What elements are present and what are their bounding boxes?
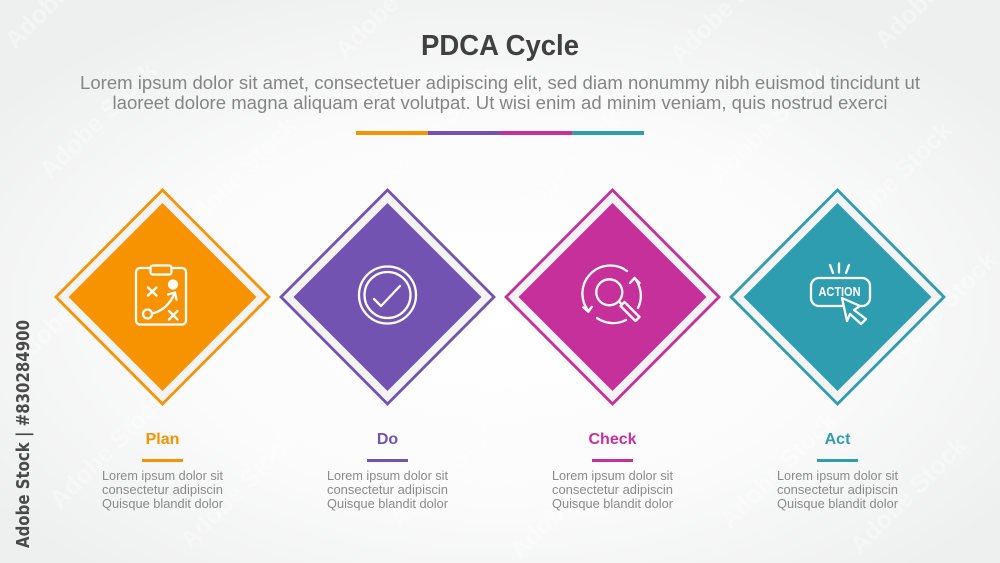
plan description: Lorem ipsum dolor sit [102,469,224,483]
title: PDCA Cycle [421,30,579,62]
act description: Quisque blandit dolor [777,497,898,511]
infographic canvas: Adobe Stock [499,106,627,234]
infographic canvas: Adobe Stock [174,111,302,239]
infographic canvas: Adobe Stock [844,431,972,559]
infographic canvas: Adobe Stock [174,426,302,554]
infographic canvas: Adobe Stock [714,406,842,534]
subtitle text block [80,73,920,113]
icon: magnifier with cycle arrows [582,266,641,323]
check diamond [506,190,719,404]
check description [552,469,674,511]
plan diamond [56,190,269,404]
panel: check [506,190,719,511]
subtitle text block: Lorem ipsum dolor sit amet, consectetuer adipiscing elit, sed diam nonummy nibh euismod tincidunt ut [80,73,920,93]
icon: check mark in circle [359,266,416,324]
do description: Lorem ipsum dolor sit [327,469,449,483]
check description: Quisque blandit dolor [552,497,673,511]
infographic canvas: Adobe Stock [874,246,1000,374]
infographic canvas: Adobe Stock [504,436,632,563]
infographic canvas: Adobe Stock [4,246,132,374]
infographic canvas: Adobe Stock [384,406,512,534]
check description: Lorem ipsum dolor sit [552,469,674,483]
infographic canvas: Adobe Stock [829,116,957,244]
icon: clipboard game plan [136,266,186,324]
act label: Act [825,431,851,448]
act description [777,469,899,511]
do diamond [281,190,494,404]
act diamond [731,190,944,404]
plan description [102,469,224,511]
plan description: consectetur adipiscin [102,483,223,497]
plan description: Quisque blandit dolor [102,497,223,511]
icon: action button with cursor [811,264,870,324]
infographic canvas: Adobe Stock [374,61,502,189]
four-colour title divider [356,131,644,135]
infographic canvas: Adobe Stock [44,386,172,514]
plan label: Plan [146,431,179,448]
do description [327,469,449,511]
act underline [817,459,858,462]
infographic canvas: Adobe Stock [34,56,162,184]
do description: consectetur adipiscin [327,483,448,497]
panel: act [731,190,944,511]
do description: Quisque blandit dolor [327,497,448,511]
do underline [367,459,408,462]
infographic canvas: Adobe Stock [704,61,832,189]
panel: do [281,190,494,511]
act description: Lorem ipsum dolor sit [777,469,899,483]
act description: consectetur adipiscin [777,483,898,497]
panel: plan [56,190,269,511]
check description: consectetur adipiscin [552,483,673,497]
check underline [592,459,633,462]
subtitle text block: laoreet dolore magna aliquam erat volutpat. Ut wisi enim ad minim veniam, quis nostrud exerci [112,93,888,113]
plan underline [142,459,183,462]
check label: Check [588,431,637,448]
do label: Do [377,431,398,448]
stock id vertical text: Adobe Stock | #830284900 [14,320,34,548]
icon: action button with cursor: ACTION [818,284,860,299]
